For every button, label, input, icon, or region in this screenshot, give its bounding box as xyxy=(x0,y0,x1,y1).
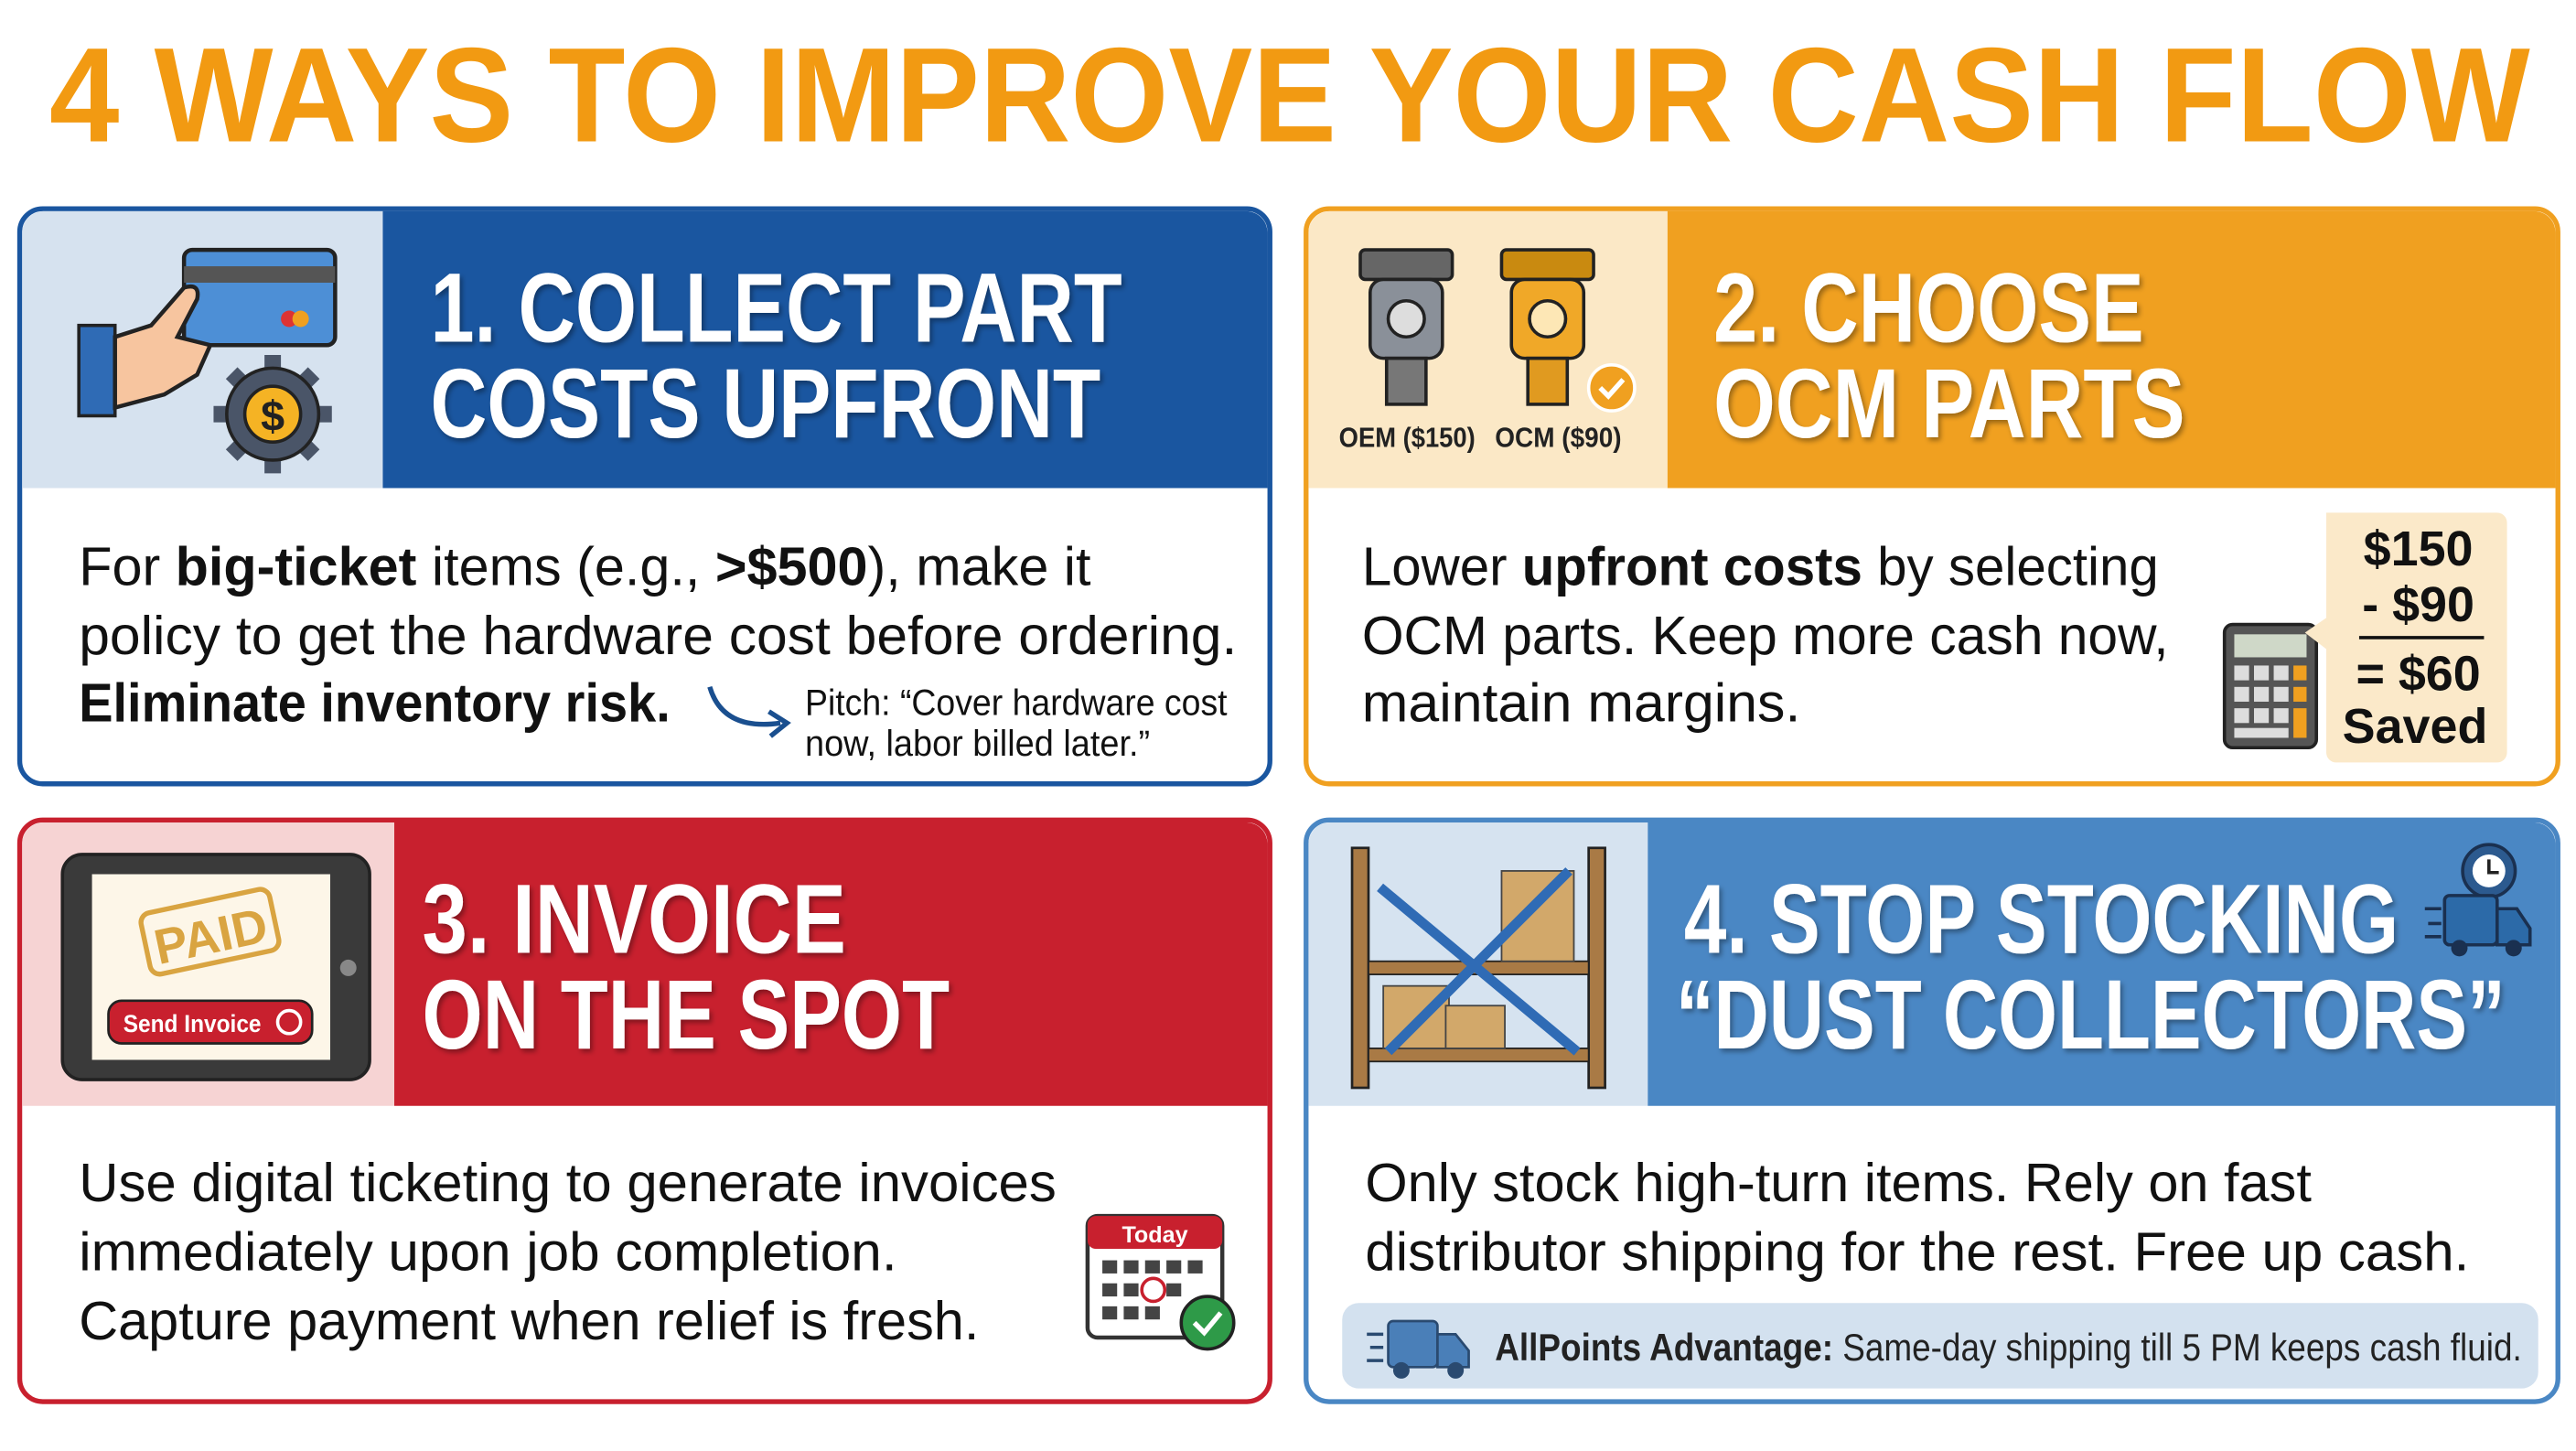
callout: AllPoints advantage: AllPoints Advantage: Same-day shipping till 5 PM keeps cash fluid. xyxy=(1495,1327,2522,1369)
icon: OEM and OCM parts: OEM ($150) xyxy=(1339,423,1476,454)
body text: maintain margins. xyxy=(1362,672,1800,734)
pitch callout xyxy=(805,683,1228,764)
panel 4: stop stocking dust collectors xyxy=(1306,820,2558,1402)
callout: savings math xyxy=(2305,512,2507,762)
body text: distributor shipping for the rest. Free up cash. xyxy=(1365,1220,2469,1282)
heading: COSTS UPFRONT xyxy=(431,348,1100,458)
heading: 2. CHOOSE xyxy=(1713,253,2144,363)
icon: tablet with paid stamp and send invoice button xyxy=(62,854,370,1080)
icon: hand with card and dollar gear xyxy=(79,250,335,473)
icon: tablet with paid stamp and send invoice button: PAID xyxy=(149,897,273,975)
callout: savings math: = $60 xyxy=(2356,646,2481,701)
heading: ON THE SPOT xyxy=(423,959,950,1069)
callout: savings math: $150 xyxy=(2364,521,2474,576)
body text xyxy=(1362,535,2169,734)
body text: For big-ticket items (e.g., >$500), make it xyxy=(79,535,1091,597)
callout: savings math: - $90 xyxy=(2362,577,2474,632)
body text: OCM parts. Keep more cash now, xyxy=(1362,605,2169,666)
icon: calendar with check: Today xyxy=(1122,1222,1188,1248)
icon: OEM and OCM parts xyxy=(1339,250,1635,454)
pitch callout: now, labor billed later.” xyxy=(805,724,1150,764)
arrow xyxy=(710,687,780,725)
callout: savings math: Saved xyxy=(2343,699,2487,754)
icon: hand with card and dollar gear: $ xyxy=(261,392,284,440)
panel 2: choose OCM parts xyxy=(1306,209,2558,784)
panel 1: collect part costs upfront xyxy=(20,209,1270,784)
icon: calendar with check xyxy=(1088,1216,1234,1349)
heading xyxy=(423,864,950,1069)
body text: Use digital ticketing to generate invoices xyxy=(79,1152,1057,1213)
panel 3: invoice on the spot xyxy=(20,820,1270,1402)
body text xyxy=(1365,1152,2469,1282)
body text: policy to get the hardware cost before ordering. xyxy=(79,605,1237,666)
pitch callout: Pitch: “Cover hardware cost xyxy=(805,683,1228,723)
icon: OEM and OCM parts: OCM ($90) xyxy=(1495,423,1622,454)
icon: dusty shelf crossed out xyxy=(1352,848,1605,1088)
heading xyxy=(431,253,1122,458)
heading xyxy=(1676,864,2506,1069)
heading: 1. COLLECT PART xyxy=(431,253,1122,363)
body text: Only stock high-turn items. Rely on fast xyxy=(1365,1152,2312,1213)
heading: 3. INVOICE xyxy=(423,864,846,974)
body text xyxy=(79,535,1237,734)
icon: tablet with paid stamp and send invoice button: Send Invoice xyxy=(123,1010,262,1037)
body text: Eliminate inventory risk. xyxy=(79,672,671,734)
body text: immediately upon job completion. xyxy=(79,1220,897,1282)
body text: Lower upfront costs by selecting xyxy=(1362,535,2159,597)
icon: delivery truck with clock xyxy=(2425,844,2530,956)
heading: OCM PARTS xyxy=(1713,348,2185,458)
body text: Capture payment when relief is fresh. xyxy=(79,1290,979,1351)
icon: calculator xyxy=(2225,625,2316,747)
heading xyxy=(1713,253,2185,458)
callout: AllPoints advantage xyxy=(1342,1303,2538,1389)
body text xyxy=(79,1152,1057,1351)
